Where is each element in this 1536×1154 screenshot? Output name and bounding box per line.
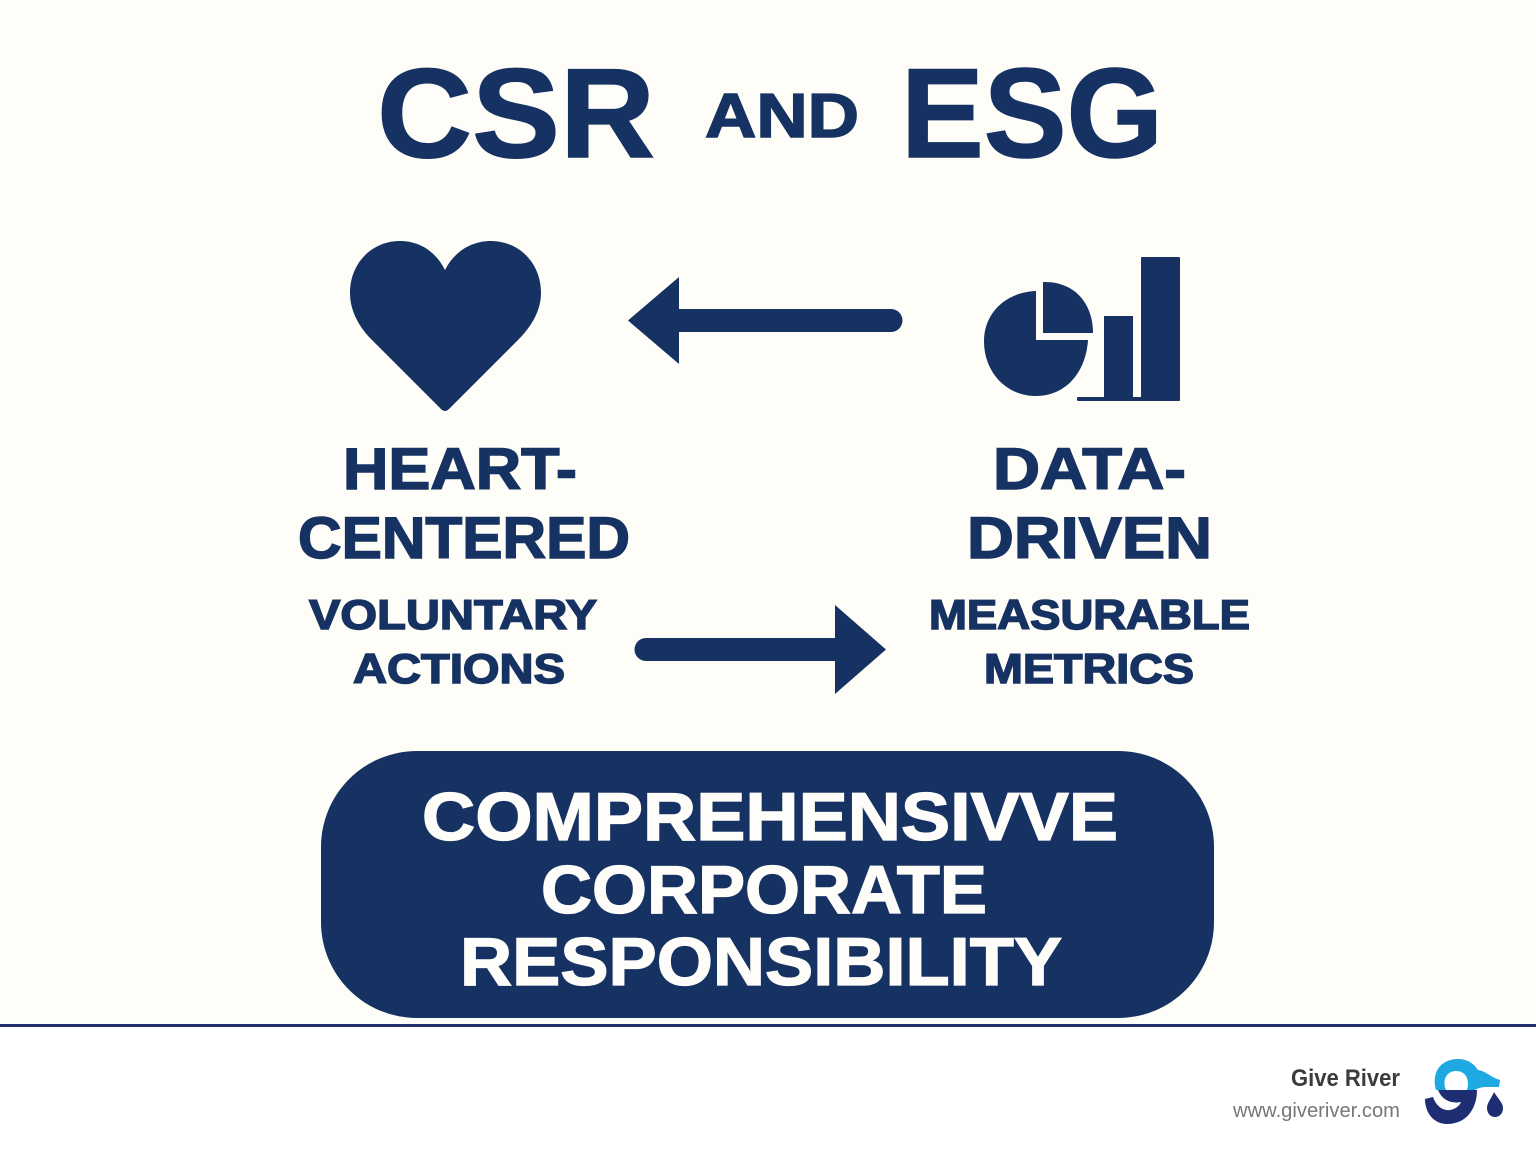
label: data-driven: [967, 437, 1212, 571]
icon: Give River logo: [1425, 1059, 1503, 1124]
arrow: pointing right: [635, 605, 886, 694]
text: voluntary actions: VOLUNTARY: [309, 591, 597, 638]
title: AND: [705, 82, 859, 151]
footer brand text: www.giveriver.com: [1232, 1099, 1400, 1122]
text: voluntary actions: ACTIONS: [353, 645, 565, 692]
footer brand text: [1232, 1065, 1400, 1122]
title: CSR: [377, 42, 655, 184]
text: measurable metrics: [929, 591, 1250, 692]
label: heart-centered: [298, 437, 630, 571]
title: [377, 42, 1163, 184]
icon: pie and bar chart: [984, 257, 1180, 401]
panel: comprehensive corporate responsibility: [321, 751, 1214, 1018]
panel: comprehensive corporate responsibility: RESPONSIBILITY: [460, 924, 1062, 1000]
label: heart-centered: HEART-: [343, 437, 577, 502]
text: voluntary actions: [309, 591, 597, 692]
icon: heart: [350, 241, 541, 411]
panel: comprehensive corporate responsibility: CORPORATE: [541, 852, 987, 928]
label: data-driven: DATA-: [993, 437, 1186, 502]
text: measurable metrics: METRICS: [984, 645, 1194, 692]
panel: comprehensive corporate responsibility: COMPREHENSIVVE: [422, 779, 1118, 855]
footer brand text: Give River: [1291, 1065, 1400, 1092]
text: measurable metrics: MEASURABLE: [929, 591, 1250, 638]
label: data-driven: DRIVEN: [967, 506, 1212, 571]
title: ESG: [901, 42, 1163, 184]
label: heart-centered: CENTERED: [298, 506, 630, 571]
arrow: pointing left: [628, 277, 903, 364]
